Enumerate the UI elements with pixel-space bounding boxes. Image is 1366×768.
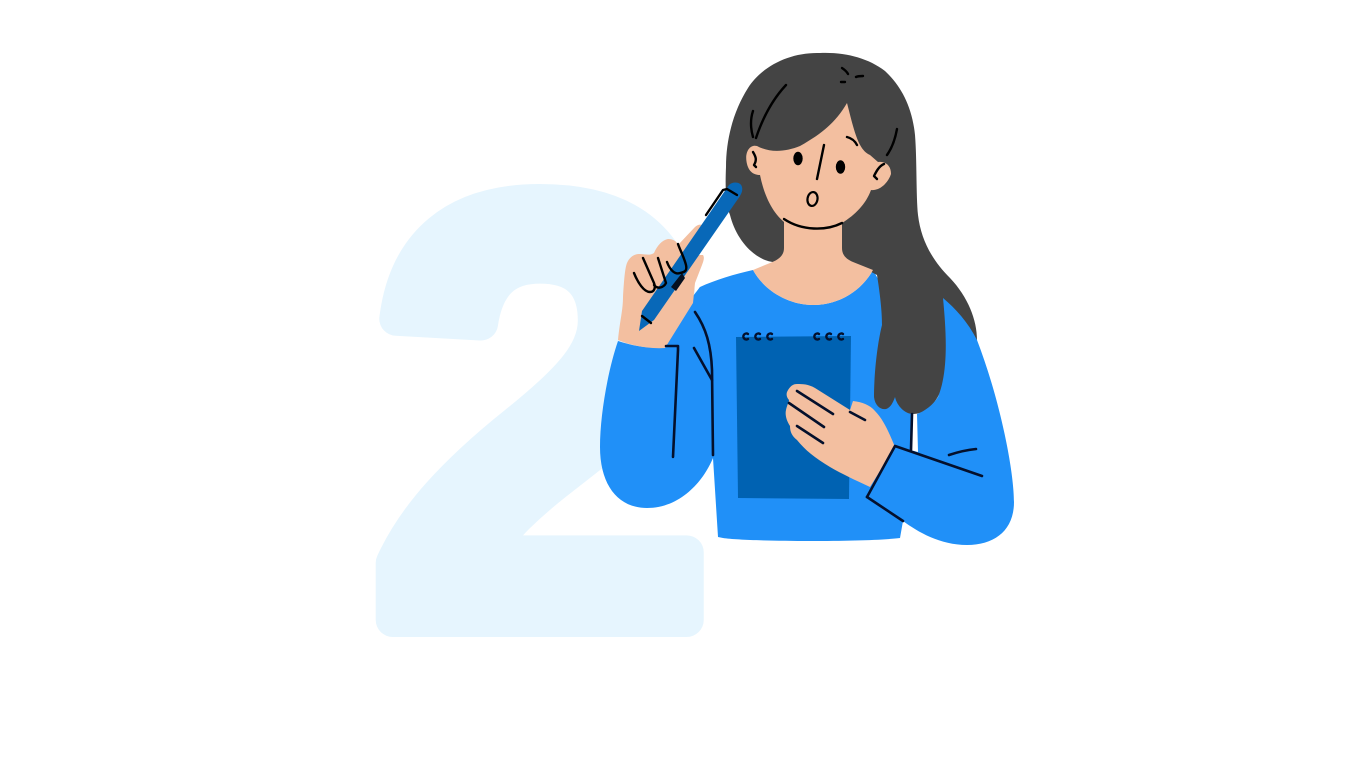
large background numeral 2: 2 [372, 77, 711, 748]
illustration: woman with notepad and pen [600, 53, 1014, 545]
lower hand finger lines [789, 391, 865, 443]
hair [726, 53, 977, 414]
left sleeve [600, 287, 713, 508]
pen [639, 183, 742, 331]
right sleeve and arm [867, 298, 1014, 545]
face details [751, 68, 897, 229]
shirt torso [690, 270, 912, 541]
neck and face [746, 103, 891, 305]
hand finger lines [634, 244, 686, 292]
notepad spiral rings [743, 333, 843, 340]
lower hand [786, 384, 895, 487]
notepad [736, 336, 851, 499]
raised hand [618, 225, 704, 348]
shirt fold lines [666, 312, 982, 521]
